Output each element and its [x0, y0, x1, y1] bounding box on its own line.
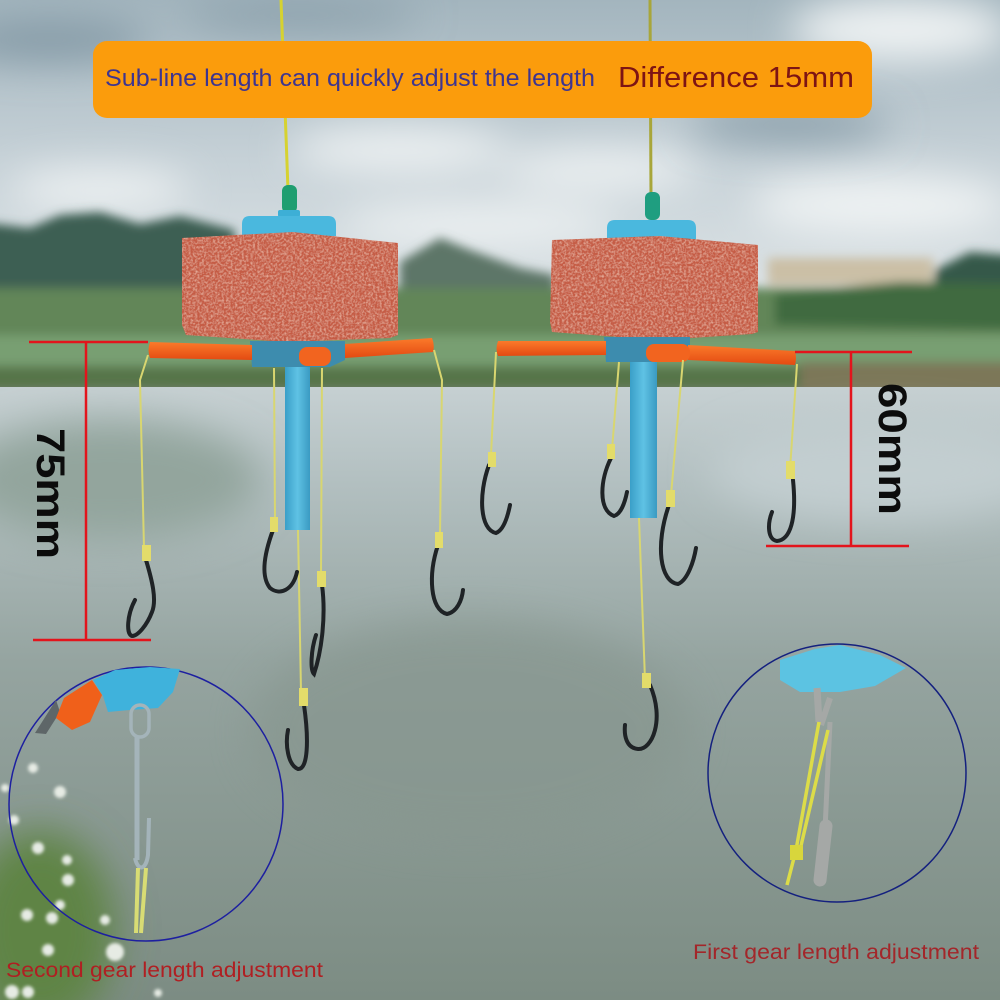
hook knots [488, 444, 795, 688]
blue connector [780, 645, 906, 692]
caption: first gear: First gear length adjustment [693, 941, 979, 964]
arms [496, 337, 796, 365]
60mm label: 60mm [870, 383, 914, 515]
center tube [630, 362, 657, 518]
banner text: sub-line: Sub-line length can quickly adjust the length [105, 65, 595, 92]
snelled lines [140, 350, 442, 692]
top cap [242, 185, 336, 236]
yellow line [136, 868, 146, 933]
left bait rig [128, 185, 463, 769]
hooks [128, 530, 463, 769]
bait block [182, 232, 398, 342]
metal clip [131, 705, 149, 867]
blue connector [93, 667, 180, 712]
hooks [482, 458, 794, 749]
detail circle: first gear [708, 644, 966, 902]
main fishing lines above the rigs [281, 0, 651, 195]
banner text: difference: Difference 15mm [618, 62, 854, 94]
detail circle: second gear [9, 667, 283, 941]
snelled lines [491, 352, 797, 680]
metal clip [817, 688, 830, 880]
caption: second gear: Second gear length adjustment [6, 959, 323, 982]
yellow line [787, 722, 828, 885]
top cap [607, 192, 696, 240]
75mm label: 75mm [28, 428, 72, 559]
right bait rig [482, 192, 797, 749]
bait block [550, 236, 758, 340]
grey tip [35, 700, 60, 734]
orange banner [93, 41, 872, 118]
orange arm [56, 680, 102, 730]
hook knots [142, 517, 443, 706]
arms [148, 338, 434, 367]
center tube [285, 365, 310, 530]
